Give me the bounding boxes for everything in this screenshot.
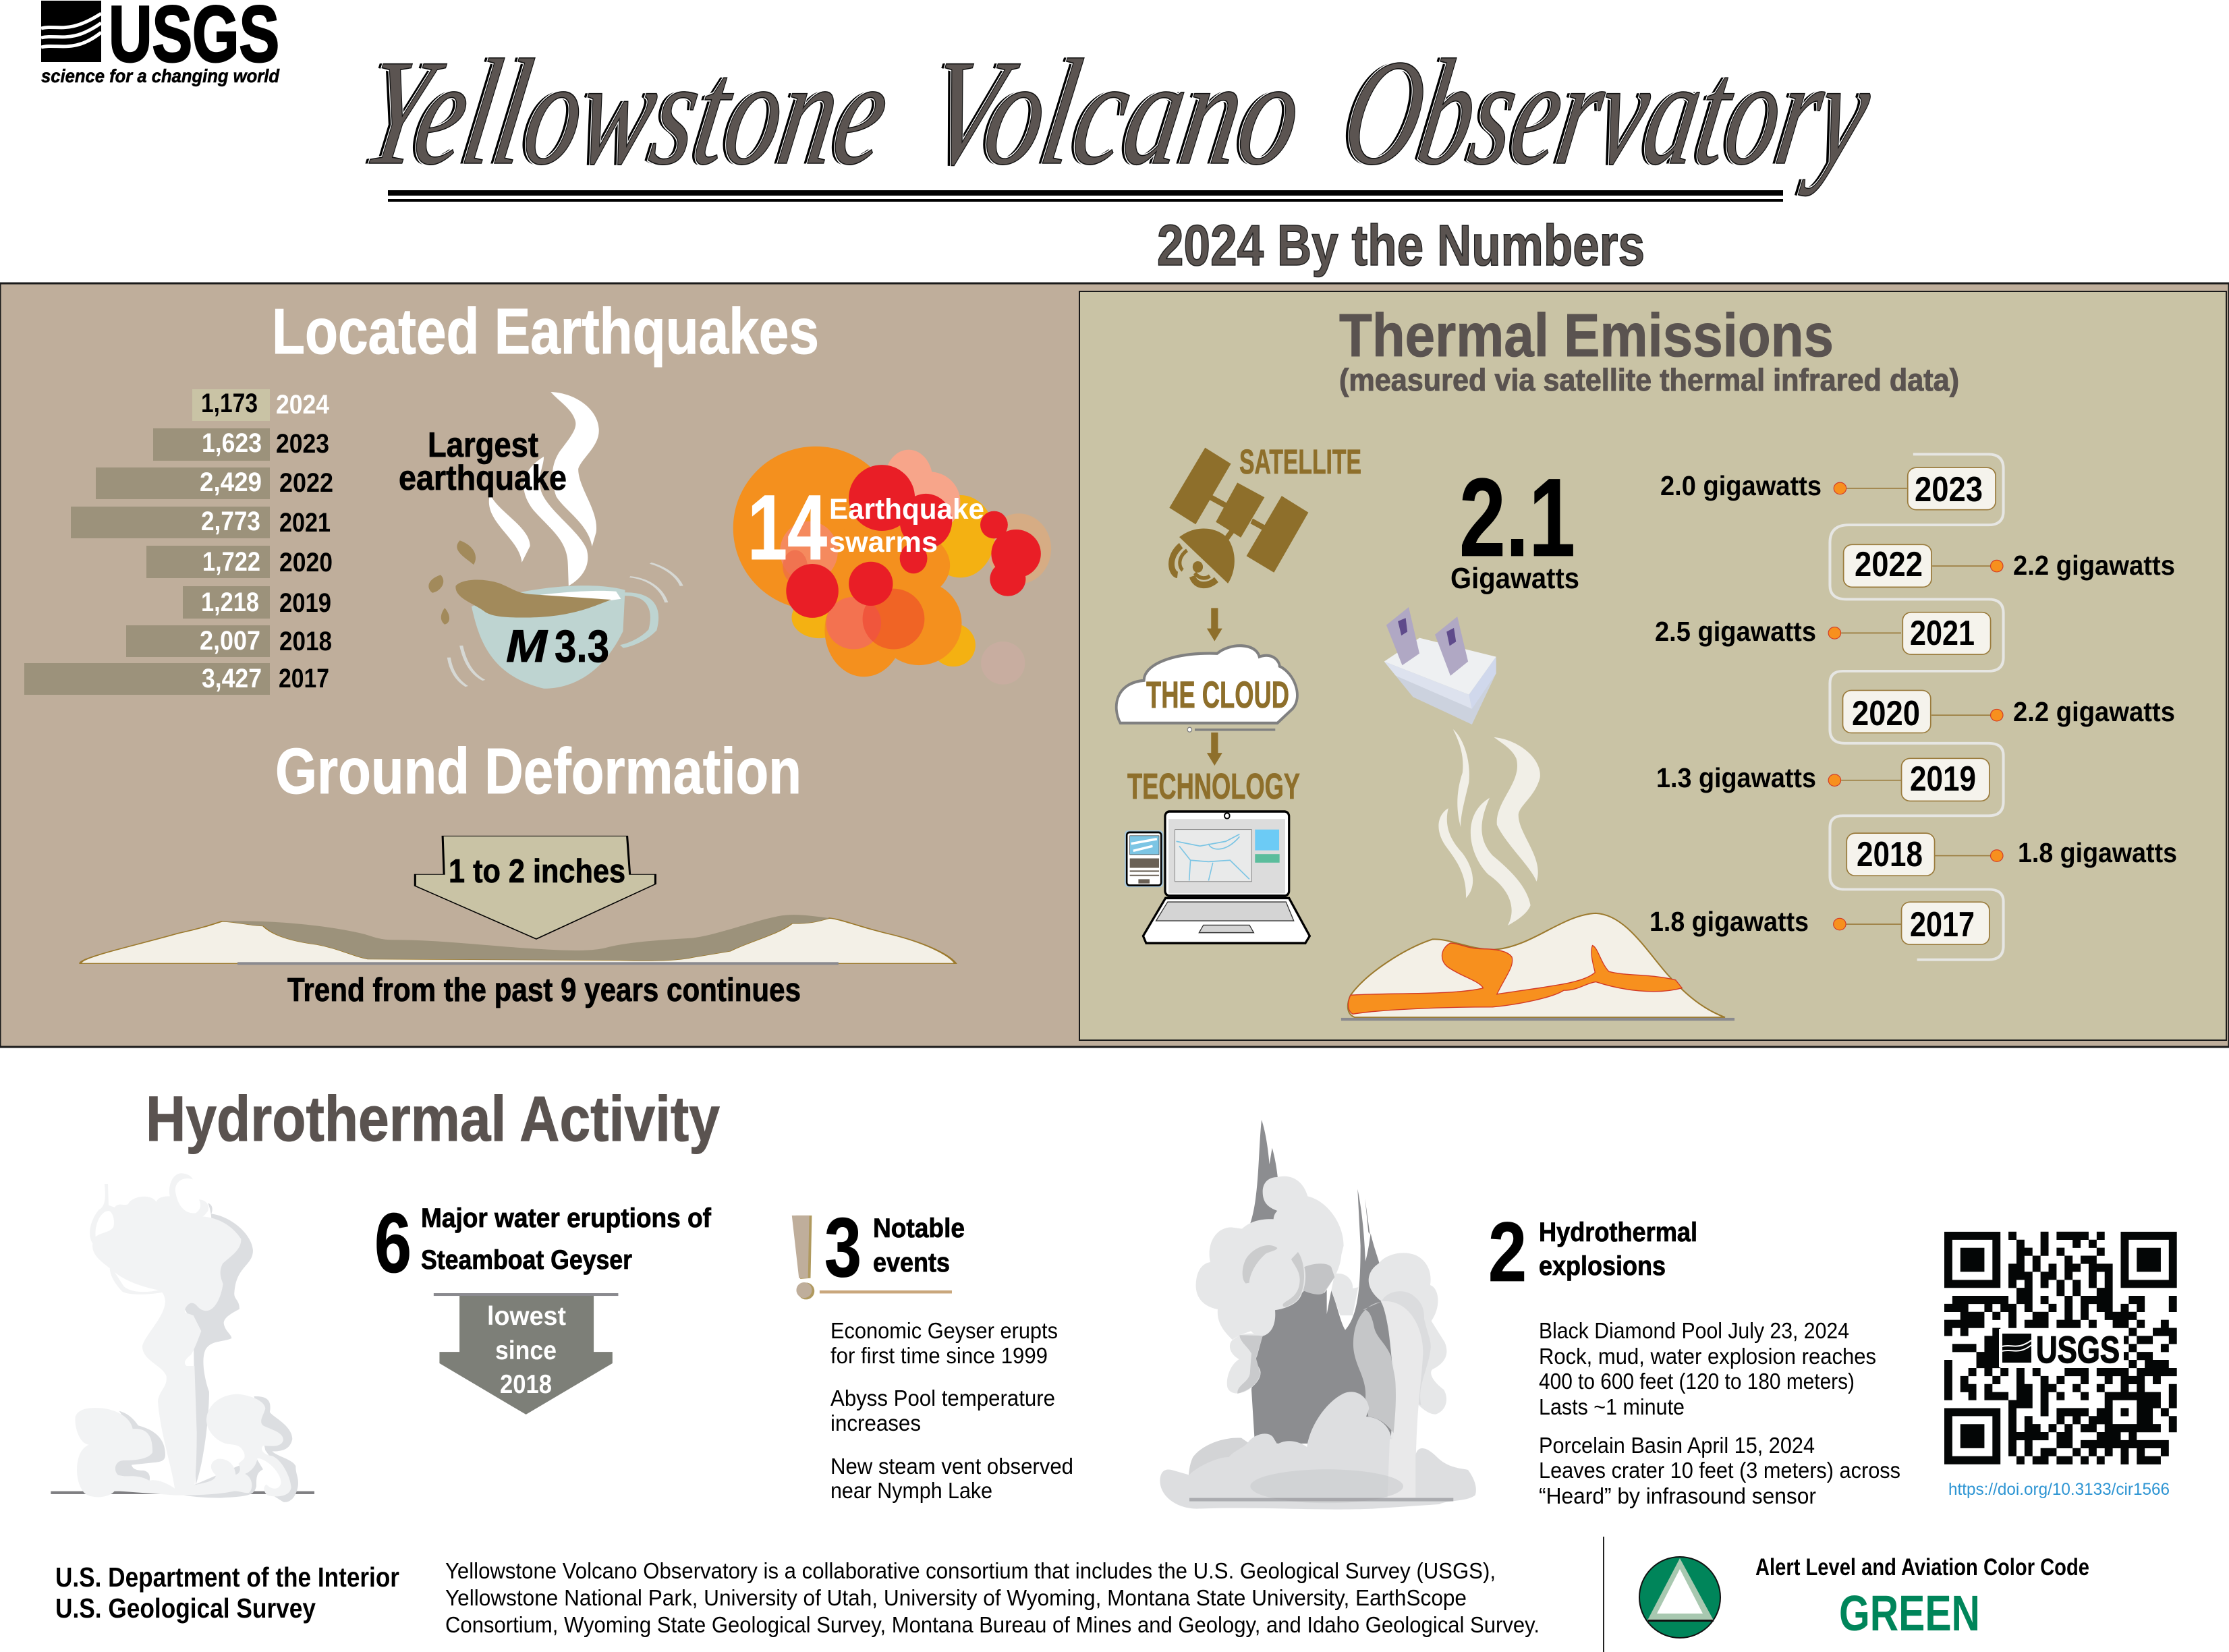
bar chart: earthquakes per year: 2022 [279,468,333,498]
bar chart: earthquakes per year: 2024 [276,390,330,420]
arrow: lowest since 2018: since [495,1336,557,1365]
stat: 3 notable events: 3 [824,1201,862,1294]
text: agency names: U.S. Department of the Interior [55,1562,399,1593]
text: notable events list: New steam vent observed [830,1454,1073,1479]
heading: hydrothermal activity: Hydrothermal Activity [146,1083,720,1155]
text: 14 earthquake swarms: swarms [829,526,938,559]
diagram: satellite to technology [1117,443,1361,943]
icon: exclamation mark [792,1216,952,1299]
icon: plug, steam and volcano [1341,607,1734,1021]
icon: alert level triangle [1639,1557,1720,1638]
panel: hydrothermal activity [51,1083,2177,1510]
icon: earthquake swarm bubbles [733,447,1051,685]
text: explosions details: Leaves crater 10 feet (3 meters) across [1539,1458,1900,1483]
arrow: lowest since 2018: 2018 [500,1370,552,1399]
text: largest earthquake: earthquake [399,459,567,498]
text: 14 earthquake swarms [747,476,984,579]
diagram: satellite to technology: TECHNOLOGY [1127,766,1300,807]
QR code [1944,1236,2177,1460]
heading: thermal emissions: Thermal Emissions [1339,302,1834,370]
bar chart: earthquakes per year: 2,429 [200,467,262,497]
text: explosions details: 400 to 600 feet (120 to 180 meters) [1539,1369,1855,1394]
text: notable events list: Abyss Pool temperature [830,1386,1055,1411]
text: notable events list: for first time since 1999 [830,1343,1048,1368]
timeline: thermal output by year: 2.5 gigawatts [1655,616,1816,647]
text: consortium description: Consortium, Wyoming State Geological Survey, Montana Bureau of Mines and Geology, and Idaho Geological Survey. [445,1612,1540,1637]
text: consortium description [445,1558,1540,1637]
title: Volcano [916,29,1314,197]
USGS logo [41,0,280,86]
stat: 2.1 gigawatts [1450,455,1579,595]
bar chart: earthquakes per year: 1,623 [202,428,262,458]
title: Volcano [916,29,1314,197]
USGS logo: science for a changing world [41,65,280,86]
stat: 6 major water eruptions: Steamboat Geyser [421,1245,632,1275]
title [349,29,1882,202]
link: doi: https://doi.org/10.3133/cir1566 [1948,1480,2170,1499]
stat: 3 notable events: Notable [873,1214,965,1243]
title: Yellowstone [353,29,901,197]
bar chart: earthquakes per year: 2018 [279,627,332,656]
title: Observatory [1329,29,1879,197]
timeline: thermal output by year: 2020 [1852,694,1920,733]
text: explosions details: Black Diamond Pool July 23, 2024 [1539,1318,1849,1343]
text: 14 earthquake swarms: Earthquake [829,493,984,525]
heading: located earthquakes: Located Earthquakes [272,295,819,368]
stat: 2 hydrothermal explosions: Hydrothermal [1539,1218,1697,1247]
bar chart: earthquakes per year: 2019 [279,588,331,618]
timeline: thermal output by year: 1.3 gigawatts [1656,762,1816,793]
bar chart: earthquakes per year: 2017 [279,664,329,693]
text: explosions details: Lasts ~1 minute [1539,1394,1685,1419]
stat: 2.1 gigawatts: Gigawatts [1450,562,1579,595]
title: Yellowstone [353,29,901,197]
panel: earthquakes and deformation background [0,283,2229,1047]
icon: deformed caldera profile [80,915,955,965]
bar chart: earthquakes per year: 2023 [276,429,329,459]
text: notable events list: increases [830,1411,921,1435]
bar chart: earthquakes per year: 2,773 [201,507,260,536]
bar chart: earthquakes per year: 1,722 [202,547,260,577]
title: Observatory [1332,29,1882,197]
heading: ground deformation: Ground Deformation [275,735,801,807]
timeline: thermal output by year: 2.2 gigawatts [2013,550,2175,581]
stat: 2 hydrothermal explosions: 2 [1488,1205,1527,1299]
text: largest earthquake [399,426,567,498]
title: Observatory [1332,29,1882,197]
timeline: thermal output by year [1649,454,2177,960]
subtitle: 2024 By the Numbers [1157,214,1645,278]
arrow: subsidence: 1 to 2 inches [449,853,625,890]
title: Yellowstone [349,29,897,197]
bar chart: earthquakes per year: 1,173 [201,389,258,418]
text: trend: Trend from the past 9 years continues [287,972,801,1008]
bar chart: earthquakes per year: 2,007 [200,626,260,656]
subheading: measurement method: (measured via satellite thermal infrared data) [1339,362,1959,397]
timeline: thermal output by year: 1.8 gigawatts [1649,906,1809,937]
panel: ground deformation [80,735,955,1008]
timeline: thermal output by year: 2022 [1855,545,1923,584]
panel: located earthquakes [24,295,1051,695]
icon: hydrothermal explosion [1160,1120,1476,1510]
icon: shaking coffee cup [428,392,681,689]
text: notable events list: near Nymph Lake [830,1478,992,1503]
timeline: thermal output by year: 2023 [1915,470,1983,509]
text: 14 earthquake swarms: 14 [747,476,827,579]
arrow: lowest since 2018: lowest [487,1302,566,1331]
footer [55,1537,2089,1652]
bar chart: earthquakes per year: 2020 [279,548,333,577]
stat: 6 major water eruptions: 6 [374,1197,412,1290]
timeline: thermal output by year: 1.8 gigawatts [2018,837,2177,868]
stat: 6 major water eruptions: Major water eruptions of [421,1203,712,1233]
text: alert level: GREEN [1839,1585,1980,1641]
QR code: USGS [2036,1328,2120,1371]
text: explosions details: Rock, mud, water explosion reaches [1539,1344,1876,1369]
timeline: thermal output by year: 2.0 gigawatts [1660,470,1822,501]
text: notable events list: Economic Geyser erupts [830,1318,1058,1343]
panel: thermal emissions [1079,291,2226,1040]
text: explosions details [1539,1318,1900,1508]
bar chart: earthquakes per year: 1,218 [201,588,259,617]
stat: 3 notable events: events [873,1248,950,1278]
text: explosions details: Porcelain Basin April 15, 2024 [1539,1433,1815,1458]
text: alert level: Alert Level and Aviation Color Code [1755,1554,2089,1580]
stat: 2.1 gigawatts: 2.1 [1459,455,1575,579]
timeline: thermal output by year: 2018 [1857,835,1923,874]
text: alert level [1755,1554,2089,1641]
timeline: thermal output by year: 2.2 gigawatts [2013,696,2175,727]
diagram: satellite to technology: SATELLITE [1239,443,1361,481]
bar chart: earthquakes per year: 2021 [279,508,331,538]
icon: water eruption geyser [51,1173,314,1502]
timeline: thermal output by year: 2017 [1910,905,1975,944]
text: largest earthquake: Largest [428,426,538,465]
text: M 3.3: 3.3 [555,621,609,672]
text: notable events list [830,1318,1073,1503]
stat: 2 hydrothermal explosions: explosions [1539,1251,1666,1281]
text: M 3.3 [506,621,609,672]
text: agency names [55,1562,399,1624]
bar chart: earthquakes per year [24,389,333,695]
timeline: thermal output by year: 2019 [1910,760,1976,799]
title: Volcano [913,29,1310,197]
text: consortium description: Yellowstone Volcano Observatory is a collaborative consortium that includes the U.S. Geological Survey (USGS), [445,1558,1496,1583]
stat: 3 notable events [824,1201,965,1294]
arrow: lowest since 2018 [434,1293,618,1415]
stat: 6 major water eruptions [374,1197,712,1290]
diagram: satellite to technology: THE CLOUD [1146,673,1289,716]
text: consortium description: Yellowstone National Park, University of Utah, University of Wyoming, Montana State University, EarthScope [445,1585,1467,1610]
text: M 3.3: M [506,621,548,672]
stat: 2 hydrothermal explosions [1488,1205,1697,1299]
text: explosions details: “Heard” by infrasound sensor [1539,1483,1816,1508]
timeline: thermal output by year: 2021 [1910,614,1975,653]
bar chart: earthquakes per year: 3,427 [202,664,262,693]
text: agency names: U.S. Geological Survey [55,1593,316,1624]
arrow: subsidence [415,836,655,939]
